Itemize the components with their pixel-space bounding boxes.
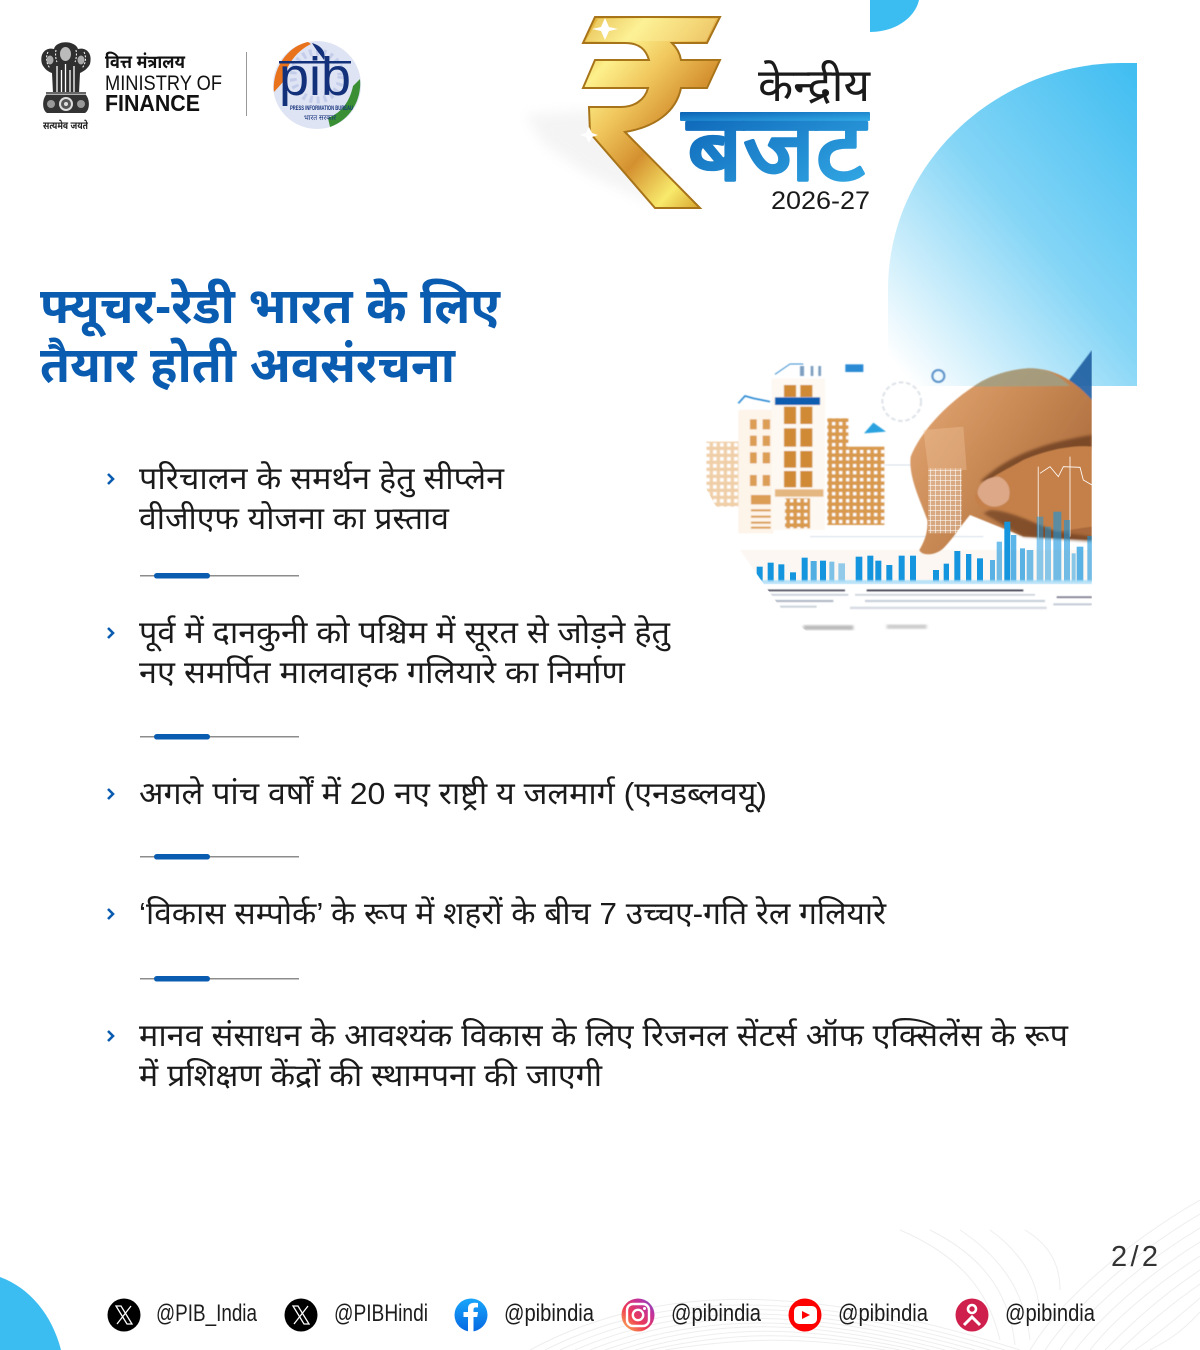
handle: Koo-style: @pibindia [1005,1300,1096,1327]
ministry name: FINANCE [105,90,200,116]
handle: PIB_India: @PIB_India [156,1300,258,1327]
decorative shape: bottom-left sky-blue corner [0,1277,61,1350]
logo: PIB: pib [279,47,351,107]
emblem motto: सत्यमेव जयते [43,119,89,132]
icon: Koo-style [956,1298,988,1332]
bullet 1 [108,461,505,536]
icon: Instagram [622,1298,654,1332]
bullet 5 [108,1018,1069,1093]
bar chart [757,512,1092,582]
heading: फ्यूचर-रेडी भारत के लिए [40,278,502,338]
bullet 3: अगले पांच वर्षों में 20 नए राष्ट्री य जलमार्ग (एनडब्लवयू) [139,776,767,813]
icon: national emblem [41,42,91,113]
ministry name: वित्त मंत्रालय [105,52,186,72]
bullet 2 [108,615,671,690]
logo: Union Budget 2026-27 [525,17,871,215]
bullet 1: परिचालन के समर्थन हेतु सीप्लेन [139,461,505,497]
handle: Facebook: @pibindia [504,1300,595,1327]
handle: YouTube: @pibindia [838,1300,929,1327]
budget title: 2026-27 [771,187,870,215]
page number: 2/2 [1111,1241,1158,1273]
bullet 5: में प्रशिक्षण केंद्रों की स्थामपना की जाएगी [139,1058,603,1093]
hand [910,350,1092,554]
budget title [680,58,871,215]
icon: YouTube [788,1298,822,1332]
heading: तैयार होती अवसंरचना [40,337,456,393]
logo: Ministry of Finance [41,42,222,132]
illustration: hand with city and chart [703,350,1092,630]
panel: sky-blue arch behind image [888,63,1137,386]
ministry name [105,52,222,116]
rupee shadow [525,110,655,205]
bullet 4: ‘विकास सम्पोर्क’ के रूप में शहरों के बीच 7 उच्चए-गति रेल गलियारे [139,896,887,931]
budget title: बजट [687,98,867,200]
logo: PIB: PRESS INFORMATION BUREAU [290,106,353,112]
bullet 2: पूर्व में दानकुनी को पश्चिम में सूरत से जोड़ने हेतु [139,615,671,652]
bullet 5: मानव संसाधन के आवश्यंक विकास के लिए रिजनल सेंटर्स ऑफ एक्सिलेंस के रूप [139,1018,1069,1053]
handle: Instagram: @pibindia [671,1300,762,1327]
handle: PIBHindi: @PIBHindi [334,1300,428,1327]
social media bar [108,1298,1096,1332]
icon: Facebook [454,1298,488,1332]
icon: golden rupee symbol [580,17,720,208]
bullet 1: वीजीएफ योजना का प्रस्ताव [139,501,450,536]
bullet 2: नए समर्पित मालवाहक गलियारे का निर्माण [139,655,626,690]
logo: PIB [273,41,361,129]
icon: X [284,1298,318,1332]
decorative shape: top sky-blue tab [870,0,919,32]
icon: X [108,1298,140,1332]
heading [40,278,502,393]
budget title: केन्द्रीय [758,58,871,111]
logo: PIB: भारत सरकार [304,115,336,122]
ministry name: MINISTRY OF [105,72,222,95]
